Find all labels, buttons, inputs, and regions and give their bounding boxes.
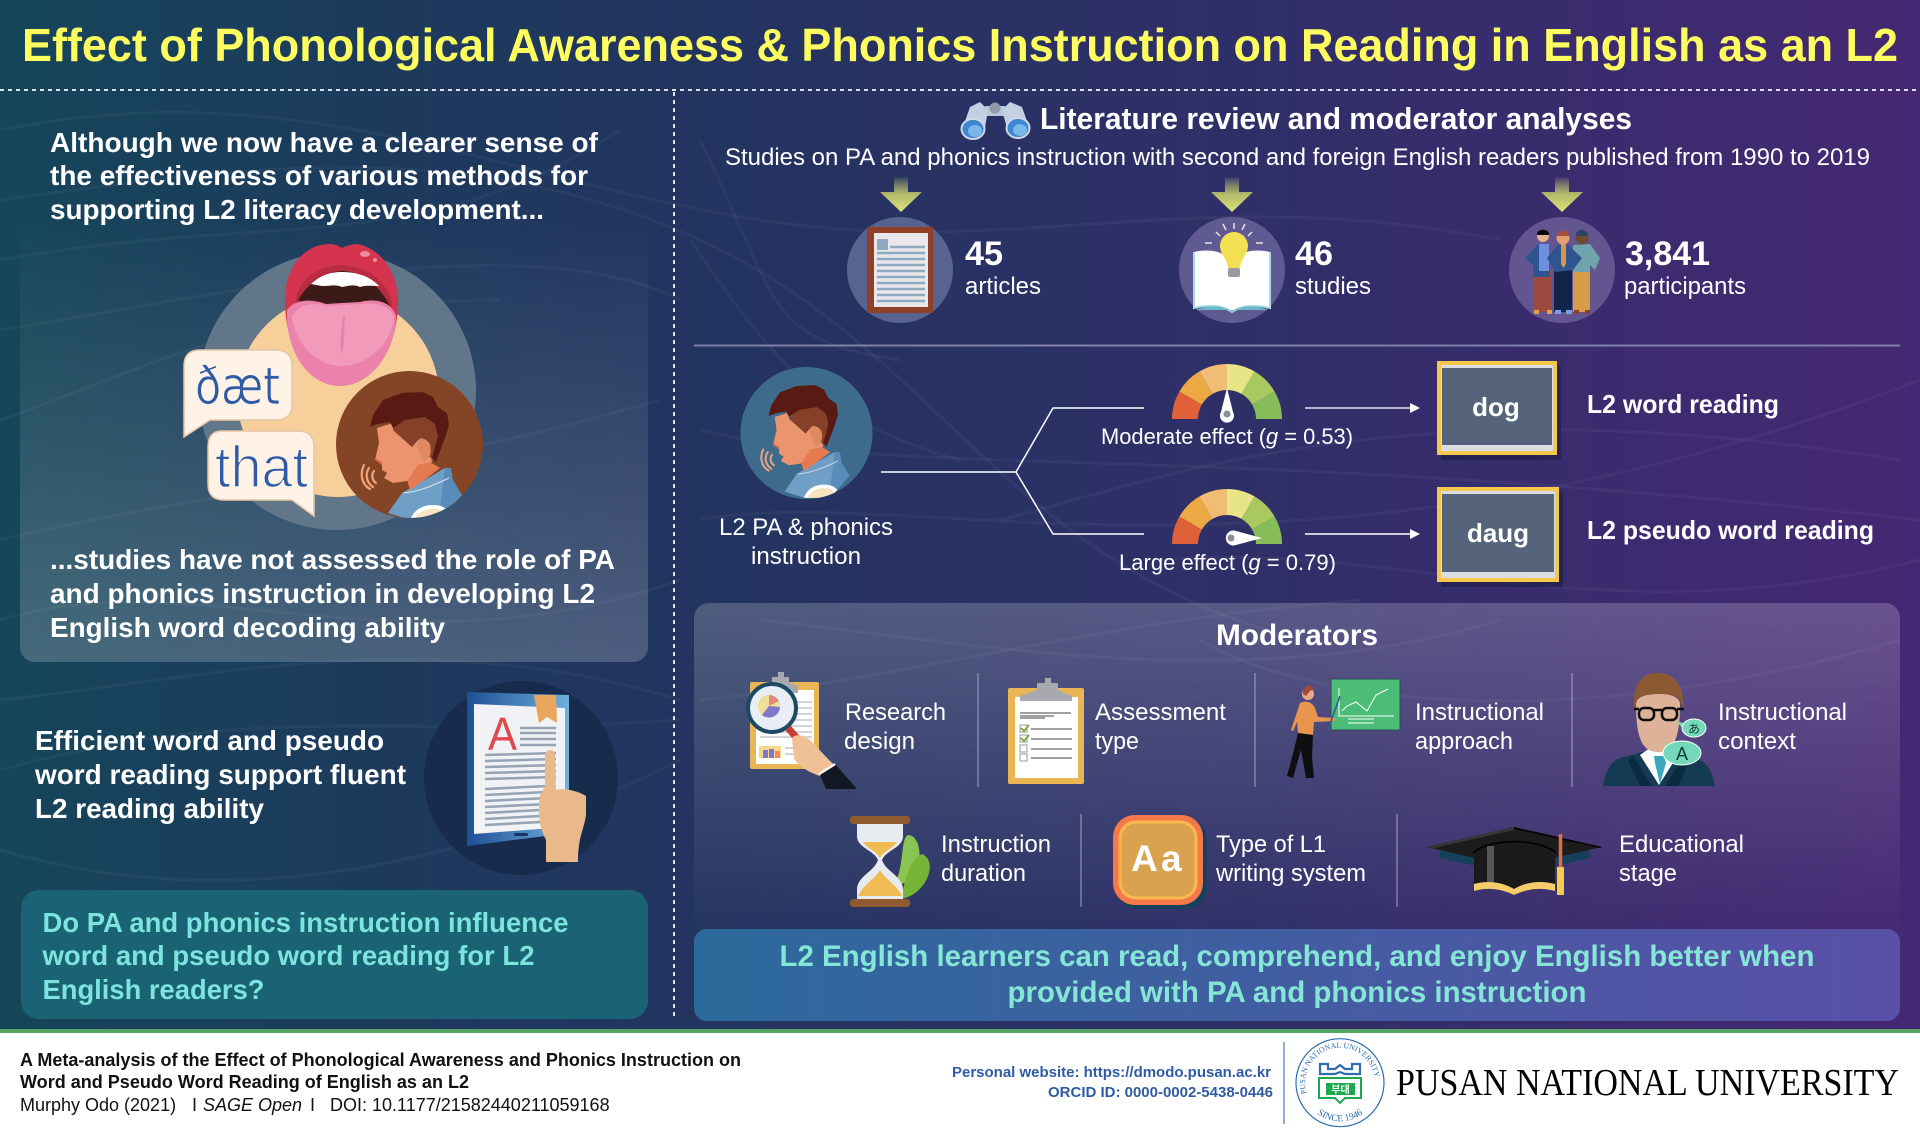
text block: studies gap <box>50 544 615 643</box>
citation: I <box>192 1095 197 1115</box>
person: middle <box>1547 231 1582 314</box>
title: Effect of Phonological Awareness & Phonics Instruction on Reading in English as an L2 <box>22 19 1898 71</box>
stat: 3,841 participants: 3,841 <box>1625 235 1710 273</box>
logo: university seal: PUSAN NATIONAL UNIVERSITY <box>1300 1042 1380 1094</box>
icon: Aa tile <box>1113 815 1207 909</box>
icon: teacher at chart <box>1287 679 1400 778</box>
text block: study scope: Studies on PA and phonics instruction with second and foreign English readers published from 1990 to 2019 <box>725 144 1870 171</box>
icon: man with language bubbles: あ <box>1688 722 1700 736</box>
icon: man with language bubbles: A <box>1676 744 1688 764</box>
arrow: to word reading <box>1305 403 1420 413</box>
moderator: educational stage: stage <box>1619 860 1677 887</box>
moderator: assessment type <box>1008 678 1226 784</box>
moderator: instructional approach <box>1287 679 1544 778</box>
moderator: educational stage <box>1427 827 1744 895</box>
moderator: instructional context: context <box>1718 728 1796 755</box>
text block: L2 literacy methods: the effectiveness of various methods for <box>50 160 588 191</box>
gauge: large effect: Large effect (g = 0.79) <box>1119 550 1336 575</box>
text block: L2 literacy methods: Although we now have a clearer sense of <box>50 127 599 158</box>
icon: article <box>867 227 933 313</box>
moderator: research design <box>748 672 946 789</box>
text block: instruction label: instruction <box>751 543 861 570</box>
logo: university seal: SINCE 1946 <box>1318 1109 1362 1122</box>
icon: speech bubble that <box>208 431 314 516</box>
panel: research question: word and pseudo word reading for L2 <box>42 940 534 971</box>
icon: speech bubble ðæt: ðæt <box>195 357 280 417</box>
citation <box>20 1050 741 1115</box>
author links <box>952 1064 1273 1101</box>
label: L2 pseudo word reading: L2 pseudo word reading <box>1587 515 1874 545</box>
icon: man with language bubbles <box>1603 673 1715 786</box>
arrow: participants <box>1541 177 1583 212</box>
icon: PA and phonics learner <box>740 367 872 499</box>
logo: university seal: 부대 <box>1331 1083 1350 1096</box>
text block: studies gap: ...studies have not assessed the role of PA <box>50 544 615 575</box>
panel: conclusion banner: L2 English learners can read, comprehend, and enjoy English better when <box>780 940 1814 973</box>
citation: SAGE Open <box>203 1095 302 1115</box>
moderator: research design: design <box>844 728 915 755</box>
moderator: type of L1 writing system: writing system <box>1215 860 1366 887</box>
gauge: moderate effect: Moderate effect (g = 0.53) <box>1101 424 1353 449</box>
panel: moderators <box>694 603 1900 943</box>
stat: 45 articles <box>847 217 1041 323</box>
label: L2 word reading: L2 word reading <box>1587 389 1779 419</box>
moderator: instruction duration: Instruction <box>941 831 1051 858</box>
stat: 46 studies: studies <box>1295 273 1371 300</box>
icon: tablet with pointing hand: A <box>488 708 517 760</box>
moderator: research design: Research <box>845 699 946 726</box>
icon: magnifier over report <box>748 672 857 789</box>
icon: Aa tile: A <box>1131 838 1158 879</box>
text block: L2 literacy methods <box>50 127 599 225</box>
panel: conclusion banner: provided with PA and phonics instruction <box>1008 976 1586 1009</box>
moderator: instructional approach: Instructional <box>1415 699 1544 726</box>
citation: A Meta-analysis of the Effect of Phonological Awareness and Phonics Instruction on <box>20 1050 741 1070</box>
word card: daug <box>1437 487 1563 587</box>
word card: dog <box>1437 361 1561 460</box>
citation: Word and Pseudo Word Reading of English as an L2 <box>20 1072 469 1092</box>
icon: Aa tile: a <box>1161 838 1182 879</box>
icon: speech bubble ðæt <box>184 350 292 437</box>
moderator: instructional context <box>1603 673 1847 786</box>
text block: instruction label: L2 PA & phonics <box>719 514 893 541</box>
moderator: type of L1 writing system <box>1113 815 1366 909</box>
panel: research question <box>21 890 648 1019</box>
text block: instruction label <box>719 514 893 570</box>
icon: hourglass with leaves <box>850 816 930 907</box>
icon: open book and light bulb <box>1194 223 1270 312</box>
icon: graduation cap <box>1427 827 1602 895</box>
icon: tablet with pointing hand <box>424 681 618 875</box>
text block: studies gap: and phonics instruction in developing L2 <box>50 578 595 609</box>
moderator: instruction duration <box>850 816 1051 907</box>
panel: research question: English readers? <box>42 974 264 1005</box>
heading: moderators: Moderators <box>1216 619 1378 652</box>
citation: I <box>310 1095 315 1115</box>
illustration: mouth, phonetics speech bubbles and speaker <box>184 244 483 530</box>
icon: binoculars <box>962 102 1030 139</box>
text block: fluent reading <box>34 725 406 824</box>
moderator: instructional context: Instructional <box>1718 699 1847 726</box>
icon: open mouth with tongue <box>285 244 398 386</box>
arrow: articles <box>880 177 922 212</box>
word card: dog: dog <box>1472 392 1520 422</box>
icon: three people <box>1525 230 1600 314</box>
stat: 3,841 participants <box>1509 217 1746 323</box>
stat: 3,841 participants: participants <box>1624 273 1746 300</box>
arrow: to pseudo word reading <box>1305 529 1420 539</box>
text block: fluent reading: Efficient word and pseudo <box>35 725 384 756</box>
stat: 45 articles: 45 <box>965 235 1003 273</box>
panel: gap statement <box>20 216 648 662</box>
footer <box>0 1029 1920 1128</box>
gauge: moderate effect <box>1101 364 1353 449</box>
moderator: assessment type: type <box>1095 728 1139 755</box>
word card: daug: daug <box>1467 518 1529 548</box>
logo: university seal <box>1295 1038 1385 1128</box>
text block: studies gap: English word decoding ability <box>50 612 445 643</box>
icon: man speaking <box>336 371 483 520</box>
author links: Personal website: https://dmodo.pusan.ac.kr <box>952 1064 1271 1081</box>
stat: 46 studies: 46 <box>1295 235 1333 273</box>
moderator: type of L1 writing system: Type of L1 <box>1216 831 1326 858</box>
text block: fluent reading: word reading support fluent <box>34 759 406 790</box>
moderator: educational stage: Educational <box>1619 831 1744 858</box>
citation: DOI: 10.1177/21582440211059168 <box>330 1095 610 1115</box>
author links: ORCID ID: 0000-0002-5438-0446 <box>1048 1084 1273 1101</box>
moderator: instructional approach: approach <box>1415 728 1513 755</box>
text block: fluent reading: L2 reading ability <box>35 793 264 824</box>
arrow: studies <box>1211 177 1253 212</box>
moderator: instruction duration: duration <box>941 860 1026 887</box>
moderator: assessment type: Assessment <box>1095 699 1226 726</box>
person: right <box>1573 230 1600 314</box>
panel: research question: Do PA and phonics instruction influence <box>42 907 568 938</box>
text block: L2 literacy methods: supporting L2 literacy development... <box>50 194 544 225</box>
heading: literature review with binoculars: Literature review and moderator analyses <box>1040 101 1632 136</box>
panel: conclusion banner <box>694 929 1900 1021</box>
stat: 46 studies <box>1179 217 1371 323</box>
connector: branching lines <box>881 408 1144 534</box>
person: left <box>1525 230 1552 314</box>
stat: 45 articles: articles <box>965 273 1041 300</box>
icon: speech bubble that: that <box>215 435 308 500</box>
icon: checklist clipboard <box>1008 678 1084 784</box>
gauge: large effect <box>1119 489 1336 575</box>
citation: Murphy Odo (2021) <box>20 1095 176 1115</box>
